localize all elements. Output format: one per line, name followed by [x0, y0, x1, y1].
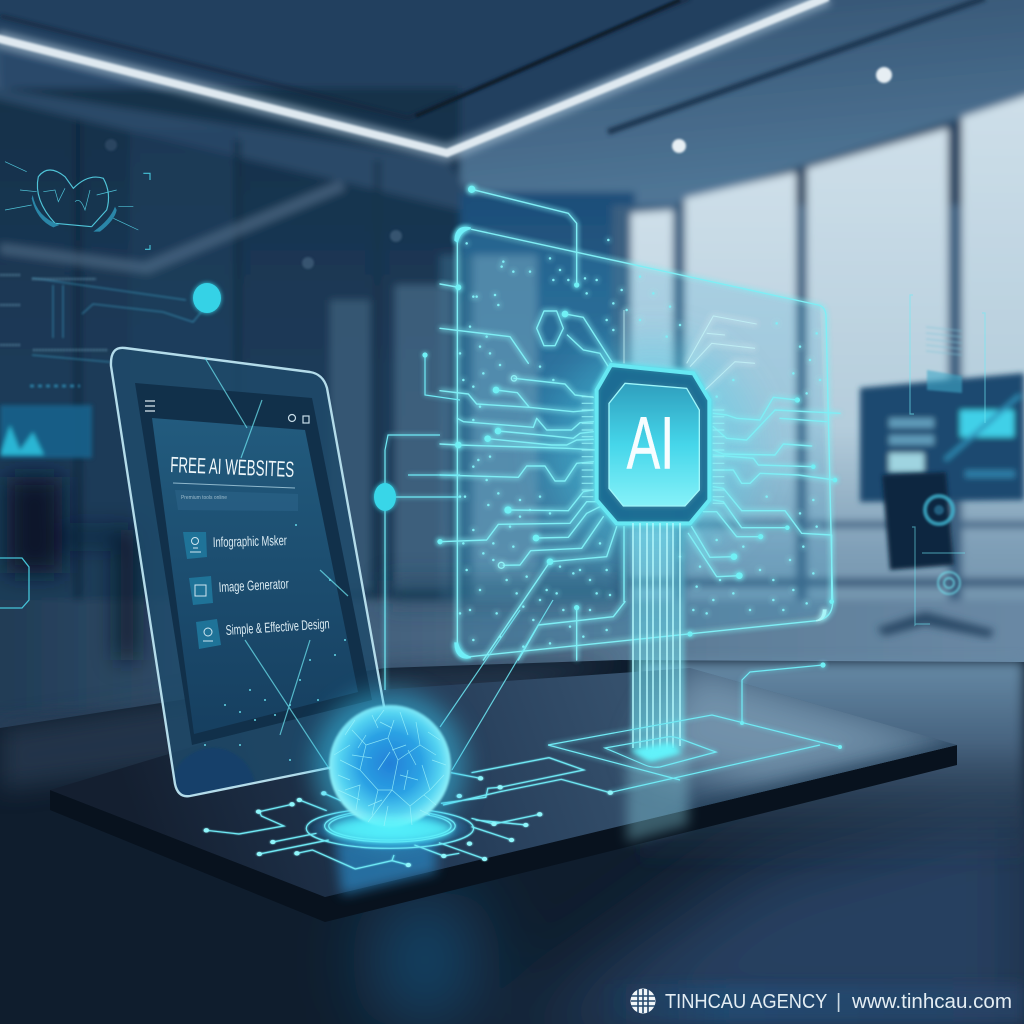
tablet body: [111, 348, 390, 796]
floor glow: [304, 805, 476, 852]
left circuit traces: [440, 189, 625, 660]
agency globe logo: [630, 988, 656, 1014]
connector traces: [385, 352, 826, 725]
dial frame line: [912, 527, 965, 625]
chip pins: [582, 397, 724, 503]
office chair: [877, 472, 994, 638]
subtitle bar: [175, 490, 298, 511]
right frame: [910, 295, 985, 423]
base plate circuit: [548, 715, 842, 793]
beam reflection: [627, 750, 688, 842]
background monitor: [860, 373, 1024, 502]
tablet reflected orb: [175, 748, 254, 795]
ceiling spotlights: [105, 67, 892, 269]
data column below chip: [631, 523, 685, 752]
data particles: [460, 240, 820, 647]
feature: simple design: Simple & Effective Design: [225, 615, 330, 638]
chip label: AI: [627, 403, 674, 485]
left hologram panels: [0, 162, 221, 608]
agency footer text: www.tinhcau.com: [851, 991, 1012, 1013]
agency footer text: TINHCAU AGENCY: [665, 991, 827, 1013]
tablet heading: FREE AI WEBSITES: [170, 452, 295, 482]
left hexagon frame: [0, 558, 29, 608]
platform sheen: [640, 668, 945, 808]
agency footer text: |: [836, 991, 841, 1013]
table surface: [0, 660, 1024, 1024]
AI circuit hologram: [437, 186, 840, 660]
orb connecting lines: [440, 600, 553, 770]
ceiling light strip: [0, 0, 828, 153]
glass wall: [0, 88, 460, 648]
feature: infographic maker: Infographic Msker: [213, 532, 287, 550]
circuit nodes: [206, 778, 610, 865]
tablet screen: [135, 383, 372, 745]
window wall: [612, 205, 1024, 625]
ceiling shadow lines: [0, 0, 985, 132]
gauge dial one: [925, 496, 953, 524]
watermark backing: [600, 984, 1024, 1024]
platform base: [50, 660, 970, 922]
feature: image generator: [189, 575, 289, 605]
circuit lines: [206, 758, 610, 869]
cyan oval node: [374, 483, 396, 511]
right holograms: [910, 295, 985, 625]
tablet toolbar icons: [288, 414, 309, 423]
left chart panel: [0, 405, 92, 458]
sphere circuit pad: [206, 758, 610, 869]
gauge dial two: [938, 572, 960, 594]
tablet particles: [205, 525, 345, 760]
ceiling surfaces: [0, 0, 1024, 220]
left data trace: [0, 275, 207, 386]
central AI chip: [582, 365, 724, 523]
feature: image generator: Image Generator: [218, 575, 289, 595]
orb reflection: [335, 835, 436, 895]
heading underline: [173, 483, 295, 488]
glowing orb: [314, 690, 466, 842]
cyan node: [193, 283, 221, 313]
tablet outline: [111, 348, 390, 796]
translucent panel frame: [455, 228, 833, 658]
heart pulse HUD: [5, 162, 150, 249]
rings: [306, 808, 474, 848]
circuit nodes: [437, 186, 837, 637]
frame stripes: [926, 327, 962, 355]
tablet menu icon: [145, 401, 155, 411]
feature: simple design: [196, 615, 330, 649]
tablet content panel: [152, 418, 358, 734]
chip aura: [548, 340, 758, 560]
tablet light rays: [205, 358, 348, 770]
feature: infographic maker: [183, 532, 287, 559]
orb vein network: [334, 710, 446, 826]
right circuit traces: [687, 316, 840, 602]
tablet: [111, 348, 390, 832]
frame data box: [927, 370, 962, 393]
subtitle text: Premium tools online: [181, 495, 227, 501]
